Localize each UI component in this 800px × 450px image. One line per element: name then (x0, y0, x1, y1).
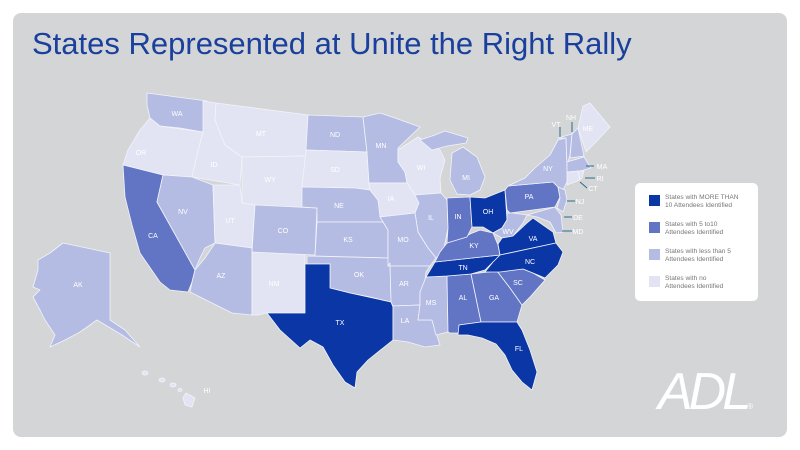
state labels: AK (73, 282, 83, 289)
state: RI (578, 171, 584, 180)
state labels: TX (336, 320, 345, 327)
state labels: OH (483, 209, 493, 216)
state: AK (33, 243, 140, 347)
state labels: CA (148, 233, 158, 240)
state: NC (485, 243, 563, 278)
state labels: RI (596, 176, 604, 183)
state: OH (470, 190, 507, 233)
state labels: FL (515, 346, 523, 353)
state labels: KS (343, 237, 353, 244)
state labels: CT (588, 186, 598, 193)
state labels: ND (330, 132, 340, 139)
legend item: 5 to 10: States with 5 to10 (665, 221, 717, 228)
state: ID (192, 101, 242, 185)
legend item: more than 10: 10 Attendees Identified (665, 202, 732, 209)
state labels: NC (525, 259, 535, 266)
state: TN (426, 253, 506, 277)
state: WV (493, 213, 527, 238)
state labels: IL (428, 215, 434, 222)
state: KS (315, 222, 388, 258)
state: UT (213, 185, 255, 248)
state: CT (567, 171, 580, 185)
state: GA (471, 271, 522, 322)
state labels: IN (454, 214, 462, 221)
state labels: ID (210, 162, 218, 169)
state labels: LA (401, 318, 410, 325)
state: AL (447, 274, 481, 333)
state labels: SC (513, 280, 523, 287)
state labels: MN (376, 143, 386, 150)
state: FL (458, 322, 537, 390)
state labels: MD (573, 229, 583, 236)
state labels: VT (552, 122, 561, 129)
legend (635, 183, 758, 301)
state: CA (123, 165, 195, 292)
legend item: 5 to 10 (649, 221, 723, 236)
state labels: NY (543, 166, 553, 173)
state labels: NV (178, 209, 188, 216)
state labels: MO (397, 237, 409, 244)
state labels (73, 111, 608, 395)
state labels: WI (417, 165, 425, 172)
state: NY (508, 138, 568, 190)
callout lines (560, 122, 595, 231)
state labels: NH (566, 115, 576, 122)
legend item: none: Attendees Identified (665, 283, 723, 290)
state: VA (498, 218, 556, 255)
state labels: CO (278, 228, 289, 235)
title: States Represented at Unite the Right Rally (32, 26, 632, 61)
state: LA (393, 305, 440, 347)
state labels: GA (489, 295, 499, 302)
state: NV (157, 175, 215, 270)
state labels: WA (171, 111, 183, 118)
legend item: less than 5: Attendees Identified (665, 256, 723, 263)
legend item: less than 5: States with less than 5 (665, 248, 731, 255)
state: ME (578, 103, 610, 152)
state: MT (215, 103, 308, 157)
state labels: NJ (576, 199, 584, 206)
state: VT (558, 134, 572, 165)
state labels: VA (529, 236, 538, 243)
state: WY (242, 156, 306, 208)
state: MN (363, 113, 420, 183)
state labels: IA (388, 196, 395, 203)
logo: ADL: ADL® (658, 363, 753, 421)
state labels: TN (458, 265, 468, 272)
state: SD (302, 150, 370, 190)
state labels: HI (204, 388, 211, 395)
state: MI upper (420, 131, 468, 150)
state: MA (567, 157, 591, 172)
state: OR (123, 118, 203, 177)
state labels: AR (399, 281, 409, 288)
state: IA (369, 183, 419, 217)
state: IN (447, 197, 472, 243)
state: AZ (190, 243, 252, 315)
state labels: SD (330, 167, 340, 174)
state: CO (252, 205, 317, 255)
state labels: WV (502, 229, 514, 236)
state: MD/DE (527, 207, 563, 233)
legend item: more than 10: States with MORE THAN (665, 194, 739, 201)
state: HI (142, 371, 195, 407)
state: NH (570, 128, 584, 158)
state labels: KY (469, 243, 479, 250)
state: IL (415, 193, 448, 258)
state: KY (435, 230, 500, 262)
state labels: MA (597, 164, 608, 171)
state labels: WY (264, 177, 276, 184)
state labels: ME (583, 126, 594, 133)
state labels: PA (525, 194, 534, 201)
state labels: DE (573, 215, 583, 222)
state: WI (398, 137, 445, 195)
state labels: NM (269, 281, 280, 288)
state labels: MT (256, 131, 267, 138)
state: AR (388, 263, 430, 306)
state: NE (302, 187, 383, 222)
state labels: MS (426, 300, 437, 307)
state labels: UT (225, 218, 235, 225)
legend item: less than 5 (649, 248, 731, 263)
state: OK (307, 256, 391, 302)
state: MI (450, 147, 485, 195)
state labels: AL (459, 295, 467, 302)
state: MO (380, 213, 436, 266)
legend item: none (649, 275, 723, 290)
state labels: OK (354, 272, 364, 279)
state: WA (147, 93, 207, 132)
state: SC (497, 269, 545, 305)
state: NJ (557, 187, 567, 212)
state: ND (306, 115, 367, 152)
state: TX (267, 264, 393, 388)
state labels: OR (136, 150, 146, 157)
state: MS (418, 276, 448, 335)
state labels: MI (462, 175, 470, 182)
state labels: NE (334, 203, 344, 210)
state: NM (252, 250, 305, 315)
legend item: 5 to 10: Attendees Identified (665, 229, 723, 236)
legend item: none: States with no (665, 275, 706, 282)
state labels: AZ (217, 273, 226, 280)
state: PA (505, 182, 560, 213)
legend item: more than 10 (649, 194, 739, 209)
